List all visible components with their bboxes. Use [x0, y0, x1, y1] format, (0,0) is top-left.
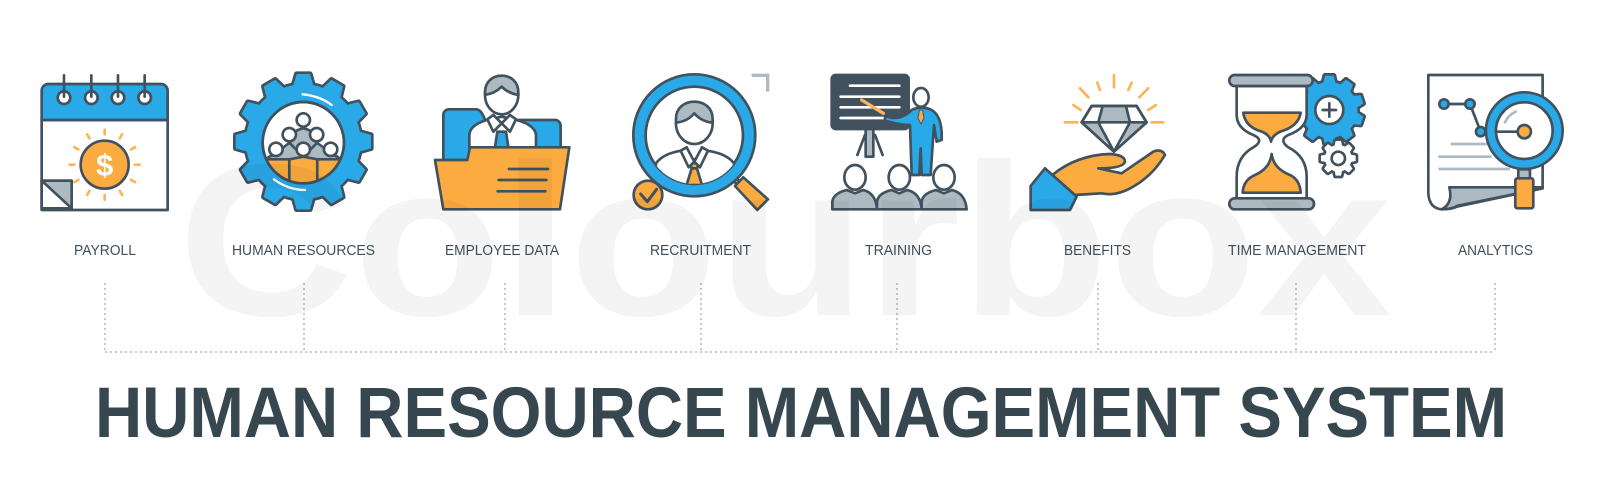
label: recruitment: RECRUITMENT	[650, 242, 751, 259]
icon: payroll calendar: $	[96, 148, 113, 182]
icon: human resources gear	[236, 74, 371, 209]
label: training: TRAINING	[865, 242, 932, 259]
label: analytics: ANALYTICS	[1458, 242, 1533, 259]
label: payroll: PAYROLL	[74, 242, 136, 259]
label: employee data: EMPLOYEE DATA	[445, 242, 559, 259]
icon: analytics report	[1428, 75, 1563, 209]
icon: benefits diamond in hand	[1031, 75, 1165, 210]
label: benefits: BENEFITS	[1064, 242, 1131, 259]
label: human resources: HUMAN RESOURCES	[232, 242, 375, 259]
icon: time management hourglass	[1229, 75, 1364, 209]
icon: recruitment magnifier	[633, 74, 768, 210]
label: time management: TIME MANAGEMENT	[1228, 242, 1366, 259]
icon: employee data folder	[435, 76, 569, 209]
watermark: Colourbox	[178, 119, 1392, 361]
dotted connector	[105, 283, 1495, 352]
icon: payroll calendar	[42, 75, 168, 210]
icon: training presenter	[832, 75, 967, 209]
title: HUMAN RESOURCE MANAGEMENT SYSTEM	[95, 374, 1507, 453]
